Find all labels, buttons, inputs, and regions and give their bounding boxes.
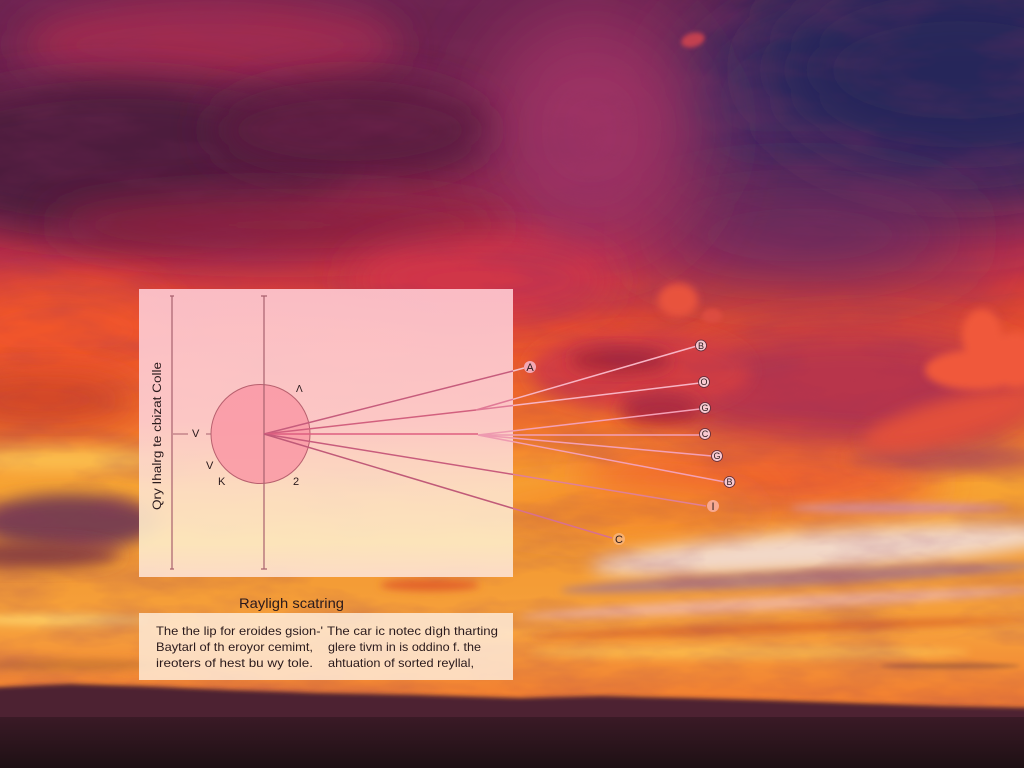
caption right column: The car ic notec dìgh tharting	[327, 624, 498, 638]
title: Rayligh scatring	[239, 595, 344, 611]
left tick marks	[173, 433, 211, 435]
sphere labels	[173, 384, 303, 488]
node B top: B	[698, 341, 704, 351]
node G lower: G	[713, 451, 721, 461]
top right label: Λ	[296, 384, 303, 395]
vertical axis centre	[261, 296, 267, 569]
lower left K label: K	[218, 476, 226, 488]
caption right column: glere tivm in is oddino f. the	[328, 640, 481, 654]
node G lower	[712, 450, 722, 462]
ray endpoint labels	[524, 340, 735, 546]
caption right column: ahtuation of sorted reyllal,	[328, 656, 474, 670]
left V label: V	[192, 428, 200, 440]
node B top	[696, 340, 706, 351]
panel: caption	[139, 613, 513, 680]
caption left column: The the lip for eroides gsion-'	[156, 624, 323, 638]
node A: A	[526, 362, 534, 374]
caption left column	[156, 624, 323, 670]
caption right column	[327, 624, 498, 670]
node I: I	[711, 501, 715, 513]
node C middle	[700, 428, 710, 440]
node G upper	[700, 402, 710, 414]
node C middle: C	[702, 429, 709, 439]
panel: diagram background	[139, 289, 513, 577]
lower left V label: V	[206, 460, 214, 472]
node O	[698, 376, 710, 388]
node C bottom	[613, 533, 625, 546]
vertical axis left	[170, 296, 174, 569]
node B lower	[724, 476, 735, 488]
node G upper: G	[701, 403, 709, 413]
lower right 2 label: 2	[293, 476, 299, 488]
node I	[707, 500, 719, 513]
node A	[524, 361, 536, 374]
distant hills and dark ground	[0, 684, 1024, 768]
caption left column: Baytarl of th eroyor cemimt,	[156, 640, 313, 654]
node O: O	[700, 377, 708, 387]
scattered rays	[264, 346, 725, 538]
caption left column: ireoters of hest bu wy tole.	[156, 656, 313, 670]
diagram: scattering sphere and rays	[170, 296, 725, 569]
node B lower: B	[726, 477, 733, 487]
label: vertical axis caption: Qry Ihalrg te cbizat Colle	[152, 362, 164, 510]
sphere	[211, 384, 310, 484]
node C bottom: C	[615, 534, 623, 546]
caption text	[156, 624, 498, 670]
